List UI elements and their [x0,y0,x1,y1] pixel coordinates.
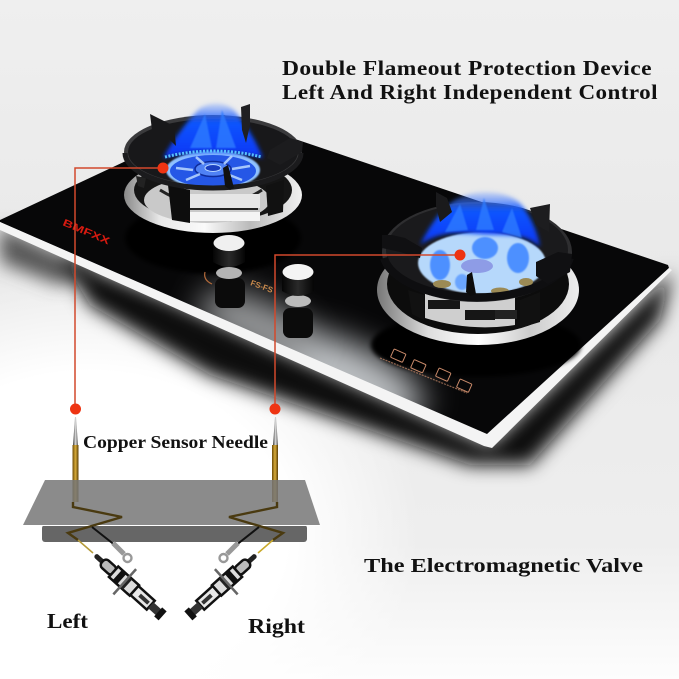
valve left [84,542,174,629]
drip ring [124,157,302,233]
label: right: Right [248,614,305,638]
burner bowl [144,177,270,223]
knob right [282,264,314,338]
knob ring [285,295,311,307]
ring front [125,153,301,188]
heading: Left And Right Independent Control [282,80,658,104]
heading: Double Flameout Protection Device [282,56,652,80]
knob left [205,235,245,308]
pot support legs [168,185,190,223]
grate fingers [436,192,452,222]
grate fingers [150,114,176,146]
sensor dot top right [454,250,466,260]
flames [163,103,263,158]
label: copper sensor needle: Copper Sensor Needle [83,432,268,452]
ring terminals [113,543,238,562]
white glass edge [0,222,672,448]
dark burner reflection [125,202,301,274]
gas cooktop [0,103,672,448]
cooktop shadow [0,226,672,465]
ring front [384,258,570,297]
glass panel [0,115,669,435]
knob body [282,272,314,296]
valve right [177,542,267,629]
sensor dot bottom left [70,404,81,414]
wire left [68,502,122,540]
wok ring [382,202,572,302]
wok ring [124,115,302,189]
sensor line right [275,255,460,409]
lower box [42,525,307,542]
knob reflection [215,278,245,308]
flame disc [166,151,260,189]
touch control icons [380,349,472,393]
brand mark: BMFXX [61,218,112,247]
sensor line left [75,168,163,409]
heading [282,56,658,104]
wire right [229,502,283,540]
label: left: Left [47,609,88,633]
needle left [72,417,78,502]
flames [420,192,540,247]
label: electromagnetic valve: The Electromagnetic Valve [364,555,643,577]
orange panel marks: FS-FS [249,278,275,295]
valve diagram [23,417,320,629]
knob ring [216,267,242,279]
sensor dot bottom right [270,404,280,414]
sensor dot top left [158,162,168,174]
dark burner reflection [371,313,581,377]
knob body [213,243,245,267]
needle right [272,417,278,502]
burner bowl [425,290,515,327]
plate [23,480,320,525]
burner left [124,103,303,274]
drip ring [377,235,579,345]
flame disc [418,232,546,294]
knob reflection [283,308,313,338]
burner right [371,192,581,377]
